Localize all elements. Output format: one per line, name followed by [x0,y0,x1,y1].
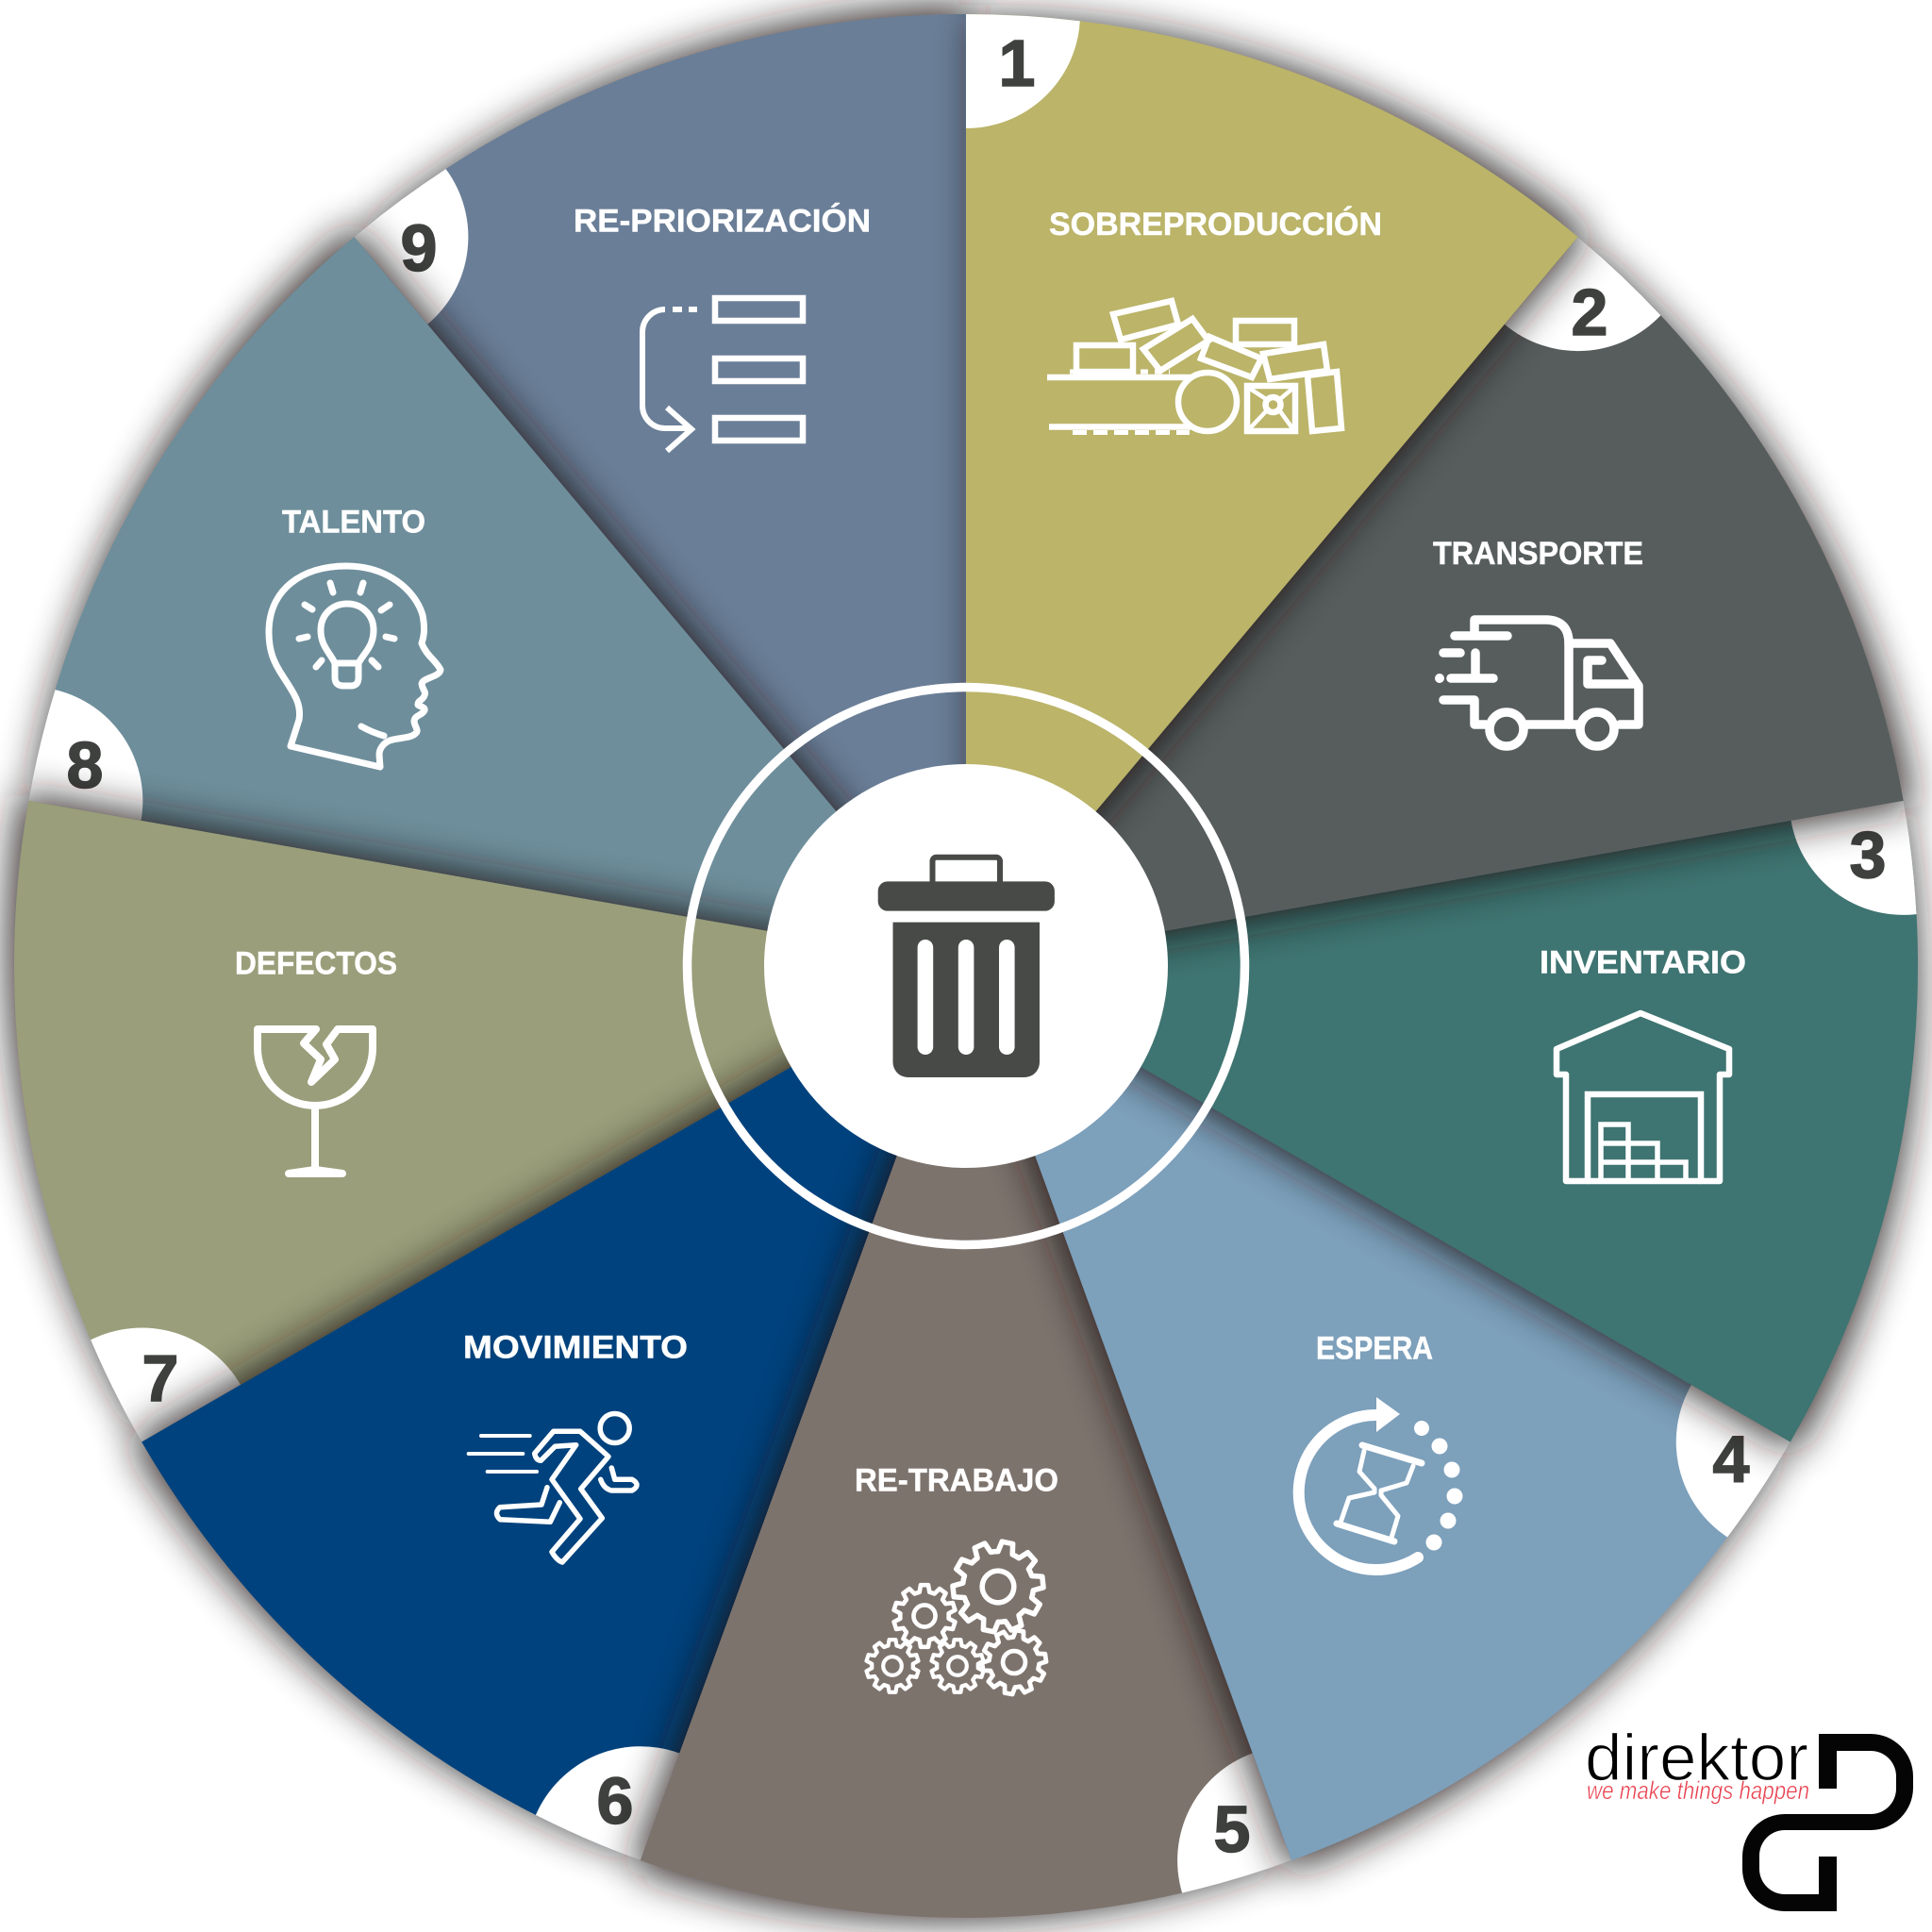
number 9: 9 [401,211,437,285]
number notch 7 [91,1328,241,1441]
number notch 6 [536,1746,679,1860]
number 3: 3 [1850,818,1886,891]
heading: movimiento: MOVIMIENTO [463,1330,688,1366]
number 4: 4 [1713,1423,1750,1496]
icon: warehouse [1557,1013,1729,1181]
icon: overproduction pile on conveyor [1047,301,1341,432]
heading: re-trabajo: RE-TRABAJO [855,1462,1058,1498]
number notch 8 [28,690,142,821]
heading: talento: TALENTO [282,504,425,540]
wedge 4 [966,966,1790,1860]
number 8: 8 [67,728,103,802]
panel: inventario (3) [958,801,1918,1452]
heading: inventario: INVENTARIO [1540,945,1746,981]
logo tagline: we make things happen [1587,1776,1809,1805]
heading: re-priorización: RE-PRIORIZACIÓN [574,204,871,240]
heading: defectos: DEFECTOS [235,945,397,981]
icon: broken glass [258,1029,373,1174]
icon: gears [865,1533,1053,1699]
number 6: 6 [597,1764,633,1838]
number notch 5 [1177,1753,1291,1893]
icon: running person [469,1413,637,1562]
wedge 8 [28,237,966,966]
panel: espera (4) [960,966,1790,1872]
wedge 2 [966,237,1904,966]
panel: re-priorización (9) [354,5,981,966]
number notch 9 [354,169,468,325]
heading: espera: ESPERA [1316,1330,1433,1366]
number 1: 1 [999,26,1035,100]
centre disc [764,764,1168,1168]
number notch 2 [1505,237,1660,351]
wedge 1 [966,14,1578,966]
panel: defectos (7) [8,793,969,1441]
wedge 5 [641,966,1291,1918]
panel: movimiento (6) [131,953,966,1860]
wedge 3 [966,801,1918,1441]
number 2: 2 [1572,275,1607,349]
number notch 3 [1790,801,1917,915]
logo: direktor [1585,1721,1913,1911]
wedge 7 [14,801,966,1441]
panel: transporte (2) [966,237,1914,980]
white ring around centre [687,687,1245,1245]
number 5: 5 [1214,1792,1250,1866]
icon: head with light bulb [269,566,441,767]
number notch 4 [1676,1385,1790,1538]
icon: reprioritised list [642,298,803,451]
logo mark [1742,1734,1913,1911]
number 7: 7 [142,1341,178,1415]
icon: delivery truck [1435,620,1639,746]
wedge 9 [354,14,966,966]
icon: hourglass with circular arrow [1299,1397,1462,1570]
icon: trash can [878,858,1055,1077]
wedge 6 [142,966,966,1860]
heading: transporte: TRANSPORTE [1433,536,1643,572]
panel: re-trabajo (5) [632,961,1291,1921]
panel: talento (8) [28,226,977,966]
heading: sobreproducción: SOBREPRODUCCIÓN [1049,207,1382,242]
panel: sobreproducción (1) [966,14,1589,975]
logo wordmark: direktor [1585,1721,1808,1794]
number notch 1 [966,14,1080,128]
